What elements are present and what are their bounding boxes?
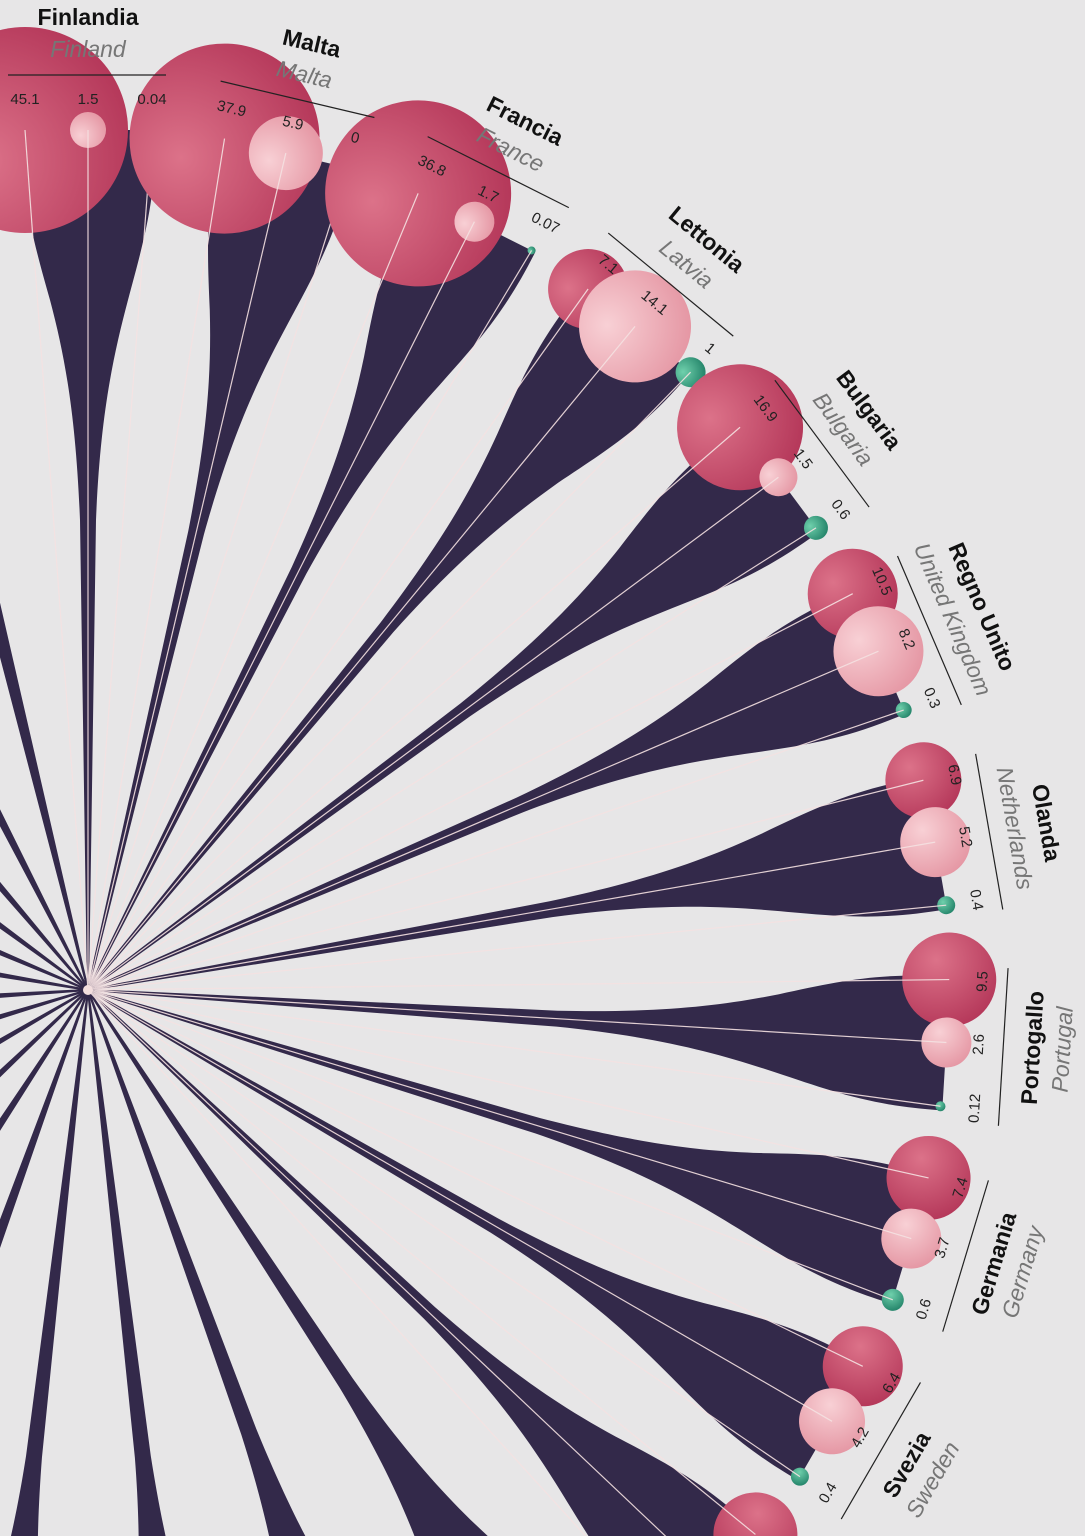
label: Germania / Germany: 3.7 (931, 1236, 954, 1260)
label: Svezia / Sweden: 4.2 (848, 1424, 873, 1451)
hub (83, 985, 93, 995)
label: Lettonia / Latvia: Lettonia (664, 201, 750, 278)
branch: Bulgaria (13, 339, 873, 1050)
label: Bulgaria: Bulgaria (831, 365, 907, 455)
label: Francia / France: 0.07 (528, 209, 562, 237)
branch: United Kingdom (45, 534, 948, 1056)
label: Svezia / Sweden: 6.4 (879, 1370, 904, 1396)
label: Malta: 37.9 (215, 97, 248, 121)
label: Olanda / Netherlands: 0.4 (966, 888, 986, 912)
label: Regno Unito / United Kingdom: Regno Unito (943, 539, 1021, 675)
label: Portogallo / Portugal: 0.12 (966, 1093, 984, 1123)
branch: Latvia (11, 220, 738, 1045)
label: Bulgaria: 1.5 (790, 446, 816, 473)
label: Germania / Germany: 0.6 (913, 1297, 935, 1322)
label: Regno Unito / United Kingdom: 0.3 (920, 685, 944, 711)
label: Olanda / Netherlands: Netherlands (992, 765, 1039, 892)
label: Portogallo / Portugal: Portugal (1047, 1005, 1078, 1093)
label: Svezia / Sweden: Sweden (900, 1437, 964, 1522)
label: Francia / France: 36.8 (415, 152, 449, 180)
branch: partial (bottom edge) (41, 914, 815, 1536)
branch: Germany (66, 889, 981, 1322)
label: Bulgaria: 16.9 (750, 392, 781, 425)
label: Germania / Germany: 7.4 (949, 1175, 972, 1200)
label: Malta: Malta (280, 24, 344, 63)
label: Malta: Malta (274, 55, 335, 93)
label: Germania / Germany: Germany (996, 1222, 1049, 1321)
label: Bulgaria: 0.6 (827, 496, 854, 523)
label: Olanda / Netherlands: 5.2 (955, 825, 975, 849)
label: Lettonia / Latvia: 7.1 (595, 252, 622, 278)
label: Finlandia / Finland: 45.1 (10, 91, 40, 108)
label: Olanda / Netherlands (943, 742, 1073, 915)
label: Olanda / Netherlands: Olanda (1027, 782, 1066, 864)
label: Olanda / Netherlands: 6.9 (944, 763, 965, 787)
label: Finlandia / Finland: 0.04 (137, 91, 167, 108)
branch: Malta (0, 24, 374, 1006)
label: Regno Unito / United Kingdom: 10.5 (868, 565, 895, 598)
label: Francia / France (413, 73, 601, 237)
label: Malta: 5.9 (281, 113, 305, 134)
label: Portogallo / Portugal: 2.6 (970, 1034, 988, 1055)
label: Lettonia / Latvia: 1 (701, 339, 719, 358)
label: Lettonia / Latvia: 14.1 (638, 287, 671, 319)
label: Portogallo / Portugal: 9.5 (974, 971, 992, 993)
label: Malta: 0 (349, 129, 361, 147)
branch: Sweden (51, 901, 917, 1504)
label: Portogallo / Portugal (965, 966, 1080, 1130)
label: Francia / France: France (473, 122, 549, 177)
label: Finlandia / Finland: Finlandia (38, 4, 139, 30)
label: Finlandia / Finland: 1.5 (78, 91, 98, 108)
label: Lettonia / Latvia: Latvia (655, 234, 718, 293)
label: Bulgaria (748, 338, 926, 527)
label: Lettonia / Latvia (587, 178, 778, 362)
label: Bulgaria: Bulgaria (808, 387, 879, 471)
branch: Portugal (84, 880, 999, 1114)
label: Francia / France: 1.7 (475, 182, 501, 207)
background spokes (off-frame countries) (0, 139, 615, 1536)
label: Regno Unito / United Kingdom (866, 526, 1027, 718)
branch: France (0, 69, 577, 1021)
label: Regno Unito / United Kingdom: 8.2 (895, 626, 918, 652)
label: Germania / Germany: Germania (966, 1209, 1021, 1318)
branch: Finland (0, 27, 156, 990)
label: Svezia / Sweden: Svezia (877, 1427, 936, 1502)
label: Germania / Germany (911, 1171, 1057, 1352)
label: Francia / France: Francia (483, 91, 568, 151)
label: Svezia / Sweden (813, 1366, 983, 1536)
label: Finlandia / Finland: Finland (50, 36, 127, 62)
label: Malta (213, 12, 391, 150)
label: Portogallo / Portugal: Portogallo (1016, 990, 1049, 1105)
label: Finlandia / Finland (8, 4, 167, 108)
label: Svezia / Sweden: 0.4 (815, 1480, 841, 1506)
label: Regno Unito / United Kingdom: United Kingdom (909, 539, 997, 700)
branch: Netherlands (71, 736, 984, 1062)
